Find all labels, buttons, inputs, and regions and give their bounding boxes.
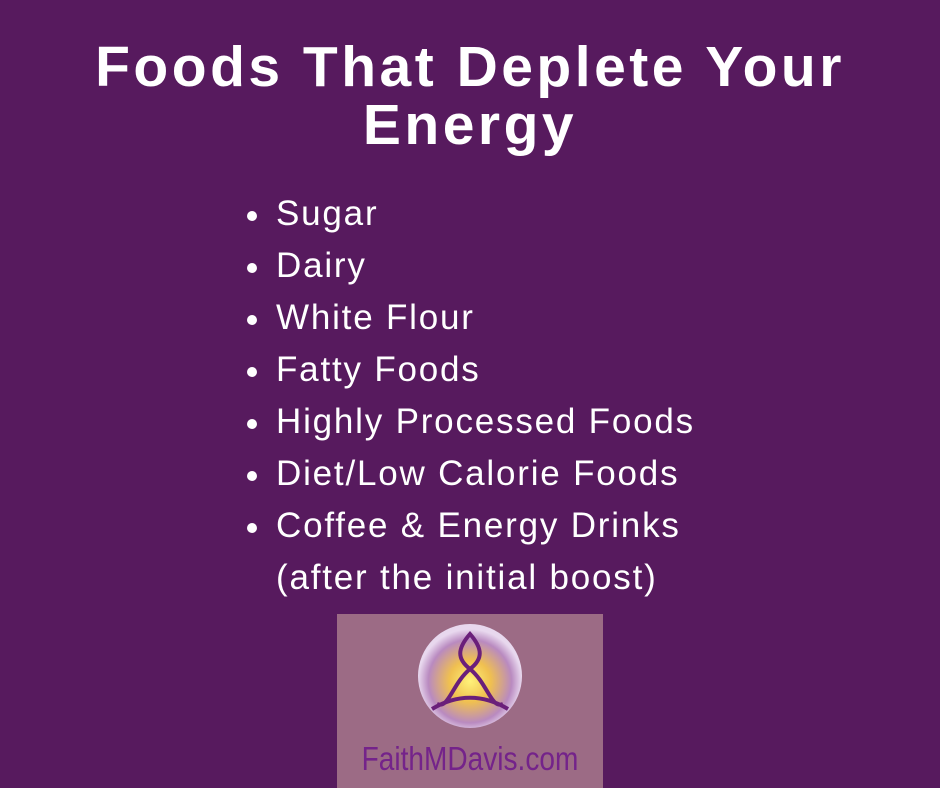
title: Foods That Deplete Your — [95, 35, 845, 99]
item: coffee: Coffee & Energy Drinks — [276, 506, 681, 545]
title — [95, 35, 845, 157]
item: coffee — [247, 506, 681, 597]
item: processed: Highly Processed Foods — [276, 402, 695, 441]
item: white flour: White Flour — [276, 298, 475, 337]
item: fatty foods: Fatty Foods — [276, 350, 481, 389]
logo — [337, 614, 603, 788]
logo text: FaithMDavis.com — [362, 740, 578, 777]
item: coffee: (after the initial boost) — [276, 558, 658, 597]
icon: meditation emblem — [418, 624, 522, 728]
list of foods — [247, 194, 695, 597]
title: Energy — [363, 93, 577, 157]
item: dairy: Dairy — [276, 246, 367, 285]
item: diet: Diet/Low Calorie Foods — [276, 454, 679, 493]
item: sugar: Sugar — [276, 194, 378, 233]
